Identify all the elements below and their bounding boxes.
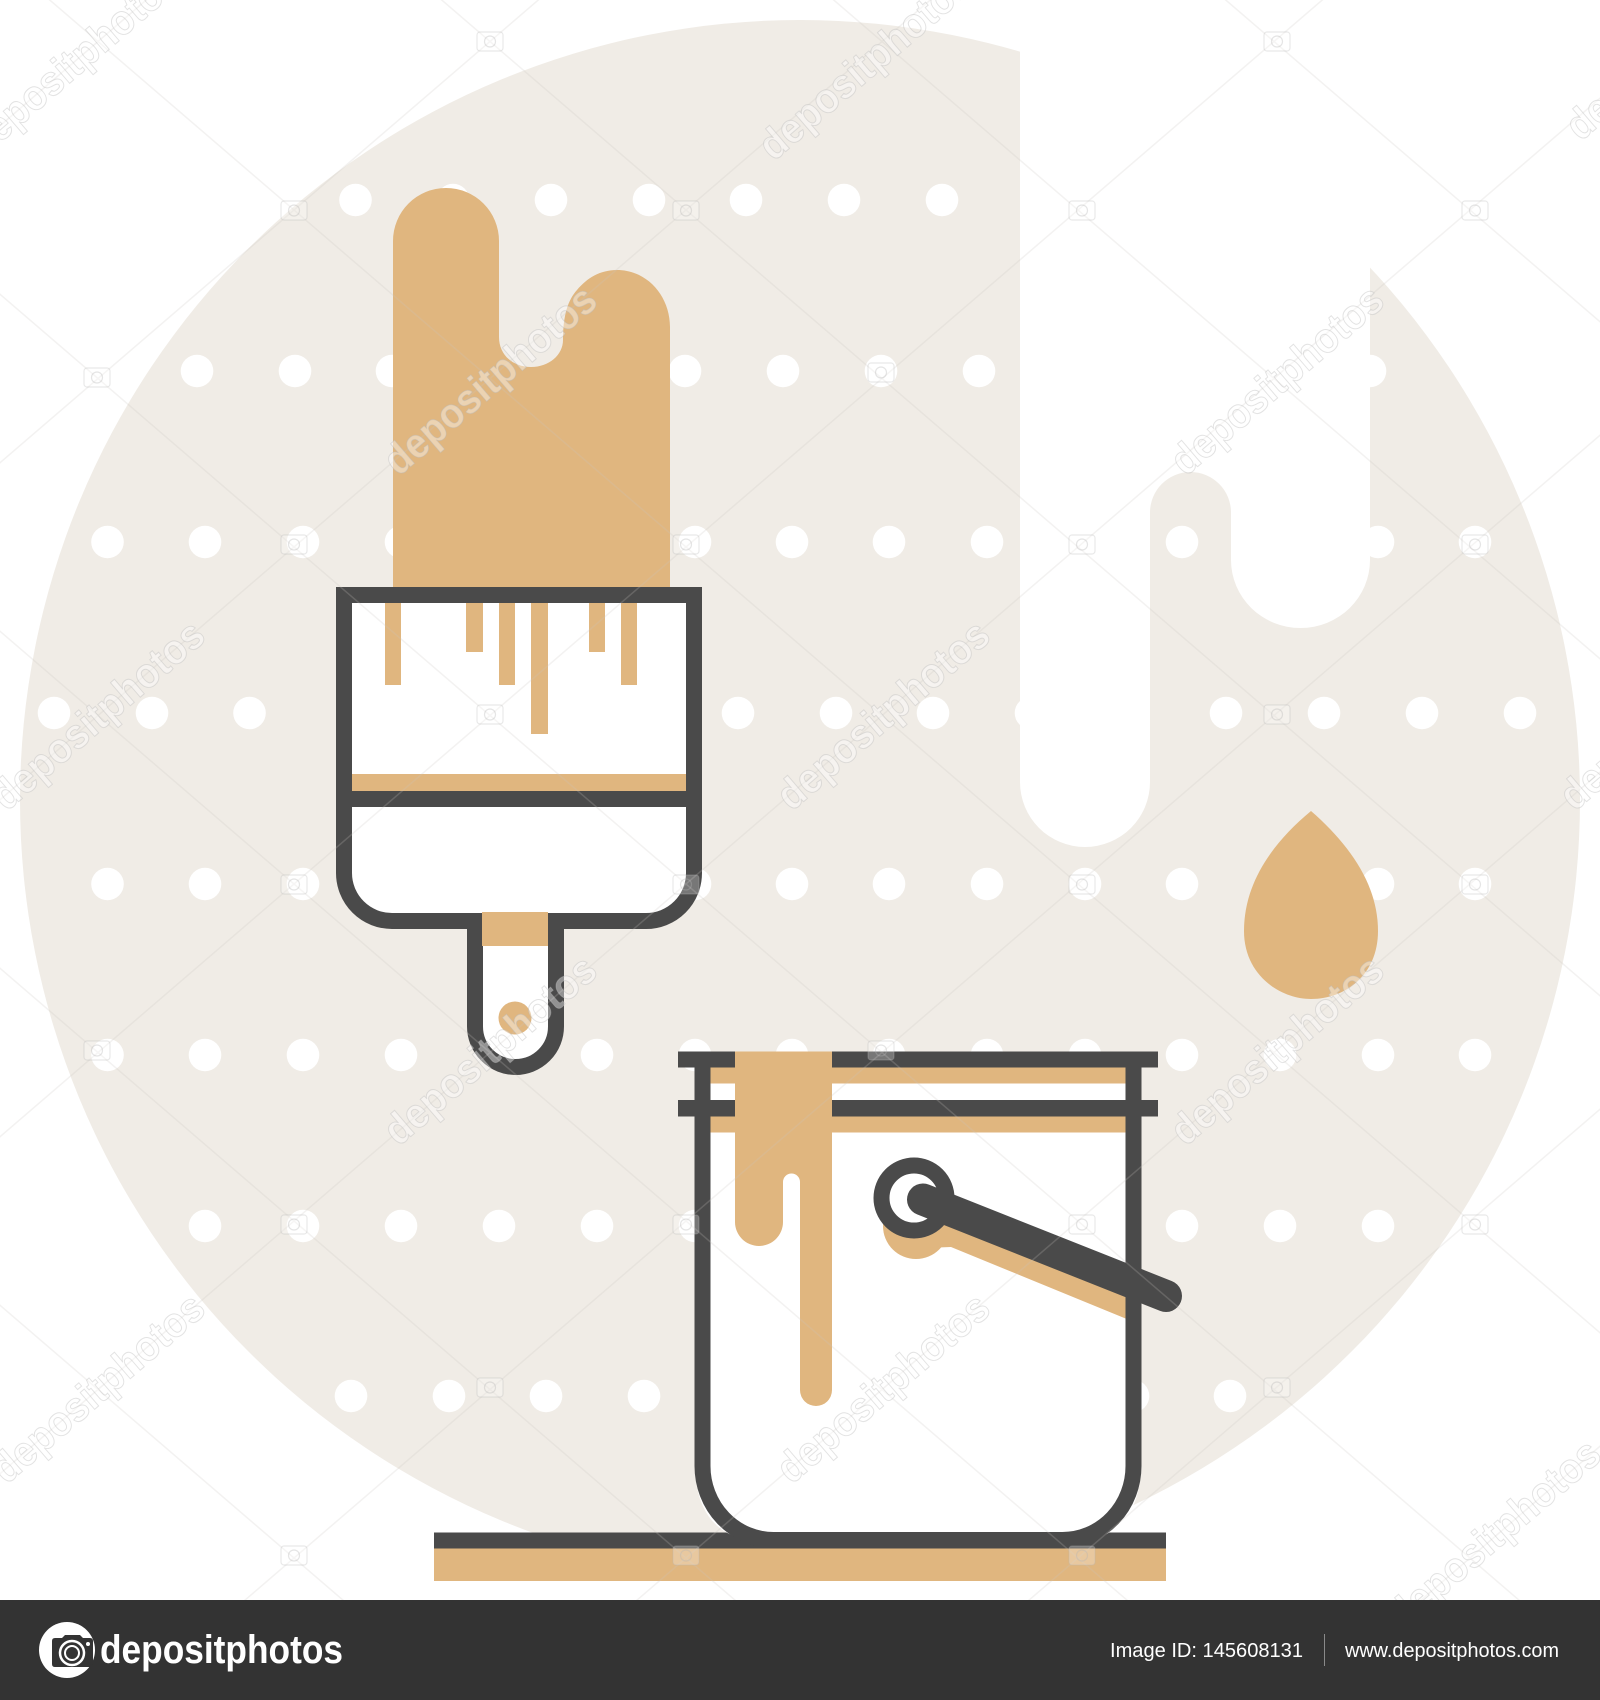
ferrule band	[344, 774, 694, 807]
floor line	[434, 1532, 1166, 1581]
brush head and handle outline	[344, 595, 694, 1067]
brush paint	[393, 188, 670, 587]
handle paint	[482, 912, 548, 946]
watermark wordmarks: depositphotos	[1161, 945, 1392, 1154]
white paint drip from the top right	[1020, 0, 1370, 847]
bucket body	[702, 1059, 1134, 1540]
paint bucket	[678, 1052, 1166, 1541]
watermark wordmarks: depositphotos	[374, 275, 605, 484]
rim tan bands	[710, 1068, 1126, 1132]
paint drop	[1244, 811, 1378, 999]
footer bar	[0, 1600, 1600, 1700]
footer divider	[1324, 1634, 1325, 1666]
handle shadow	[883, 1193, 1126, 1318]
white halo around bucket base	[696, 1480, 1140, 1541]
dot pattern	[38, 184, 1536, 1412]
handle bar	[923, 1200, 1166, 1296]
paint brush	[344, 188, 694, 1067]
watermark camera icons	[84, 32, 1488, 1565]
watermark wordmarks: depositphotos	[767, 610, 998, 819]
bristle drips	[385, 603, 637, 734]
icon: camera logo	[39, 1622, 95, 1678]
watermark wordmarks: depositphotos	[1161, 275, 1392, 484]
logo wordmark: depositphotos	[100, 1628, 343, 1672]
website url: www.depositphotos.com	[1344, 1640, 1559, 1662]
handle ring	[882, 1166, 946, 1230]
image id: Image ID: 145608131	[1110, 1640, 1303, 1662]
paint spill over rim	[735, 1052, 832, 1406]
rim bars	[678, 1052, 1158, 1116]
watermark wordmarks: depositphotos	[374, 945, 605, 1154]
handle hole	[498, 1002, 532, 1034]
watermark wordmarks: depositphotos	[767, 1283, 998, 1492]
